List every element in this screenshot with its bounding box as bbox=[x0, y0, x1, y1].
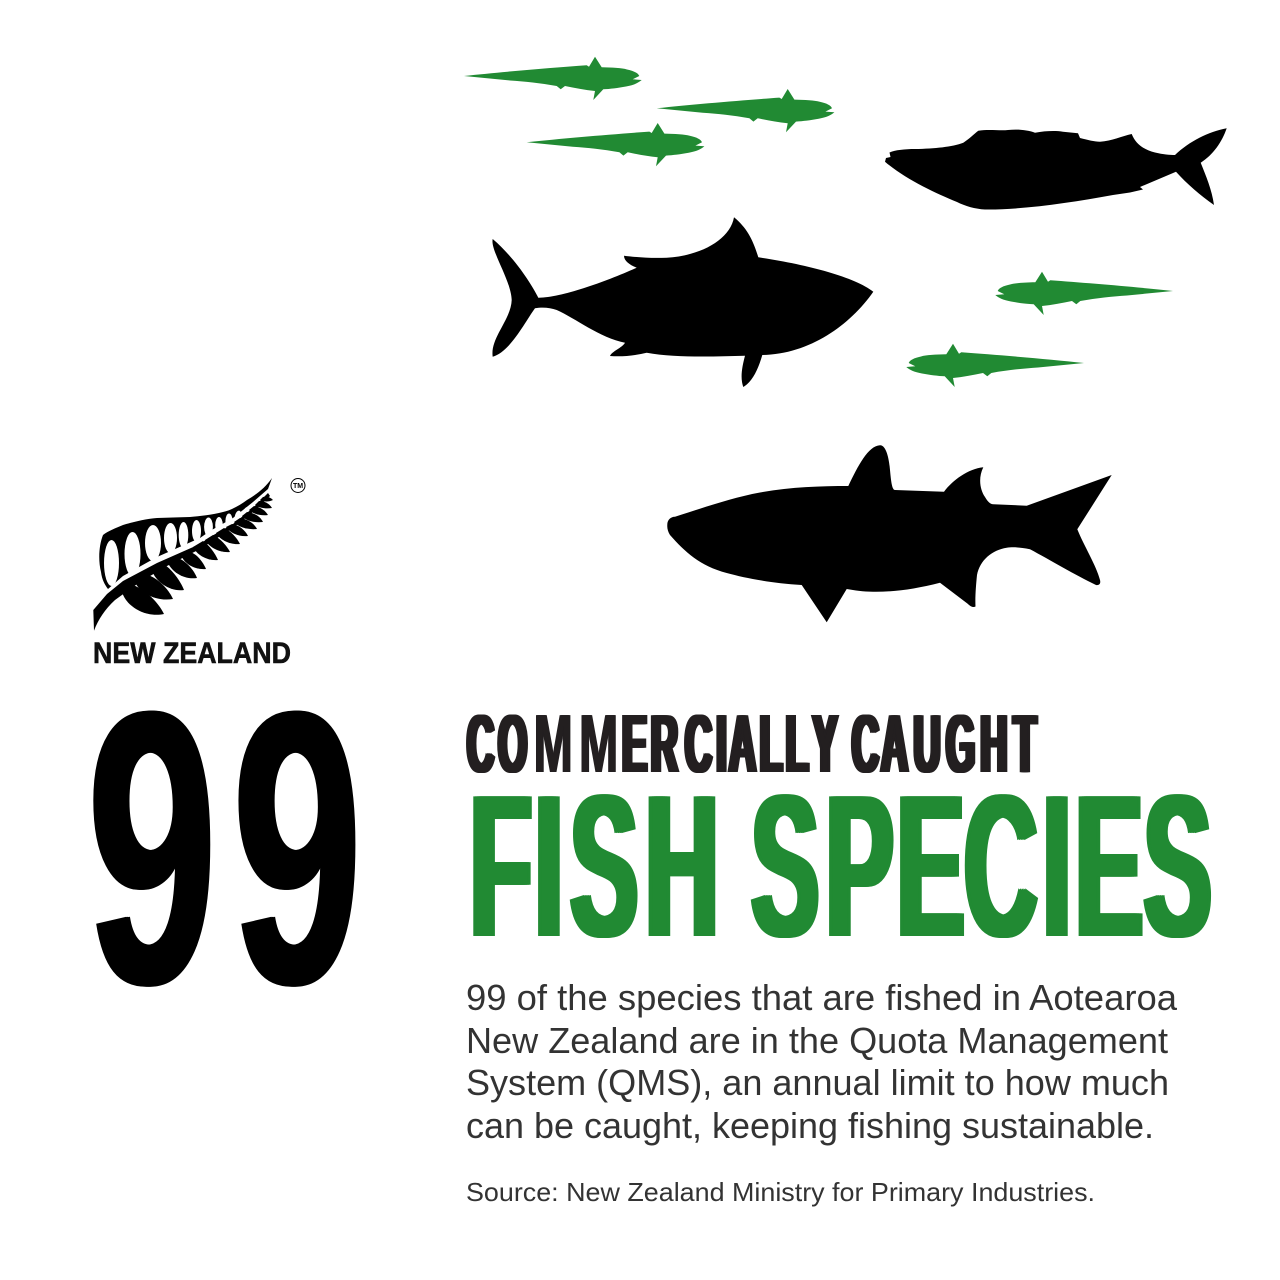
school of green fish, middle right bbox=[906, 272, 1173, 387]
fern: stem and lower leaves bbox=[93, 493, 273, 631]
black fish, lower centre bbox=[667, 445, 1112, 622]
green fish 1 bbox=[464, 57, 642, 100]
school of green fish, top left bbox=[464, 57, 834, 166]
big number 99: 99 bbox=[86, 630, 377, 1066]
heading: commercially caught: CO ERCIALLY CAUGHT bbox=[467, 697, 1037, 790]
body paragraph: 99 of the species that are fished in Aotearoa bbox=[466, 977, 1178, 1018]
green fish 3 bbox=[527, 123, 704, 166]
body paragraph: can be caught, keeping fishing sustainable. bbox=[466, 1105, 1154, 1146]
green fish 2 bbox=[657, 89, 834, 132]
heading: fish species: FISH SPECIES bbox=[470, 753, 1211, 980]
body paragraph: System (QMS), an annual limit to how much bbox=[466, 1062, 1169, 1103]
green fish 5 bbox=[906, 344, 1084, 387]
logo wordmark: NEW ZEALAND bbox=[93, 637, 291, 670]
heading: commercially caught: M bbox=[580, 697, 618, 790]
body paragraph: New Zealand are in the Quota Management bbox=[466, 1020, 1168, 1061]
fern: white leaflets bbox=[104, 498, 263, 586]
New Zealand silver fern logo bbox=[93, 478, 305, 670]
black fish, top right bbox=[885, 128, 1227, 210]
body paragraph bbox=[466, 977, 1178, 1146]
fern: upper frond bbox=[99, 478, 272, 589]
trademark symbol bbox=[291, 478, 305, 492]
source note: Source: New Zealand Ministry for Primary Industries. bbox=[466, 1177, 1095, 1207]
black tuna, centre bbox=[492, 217, 873, 387]
green fish 4 bbox=[995, 272, 1173, 315]
heading: commercially caught: M bbox=[534, 697, 573, 790]
trademark symbol: TM bbox=[293, 483, 303, 490]
